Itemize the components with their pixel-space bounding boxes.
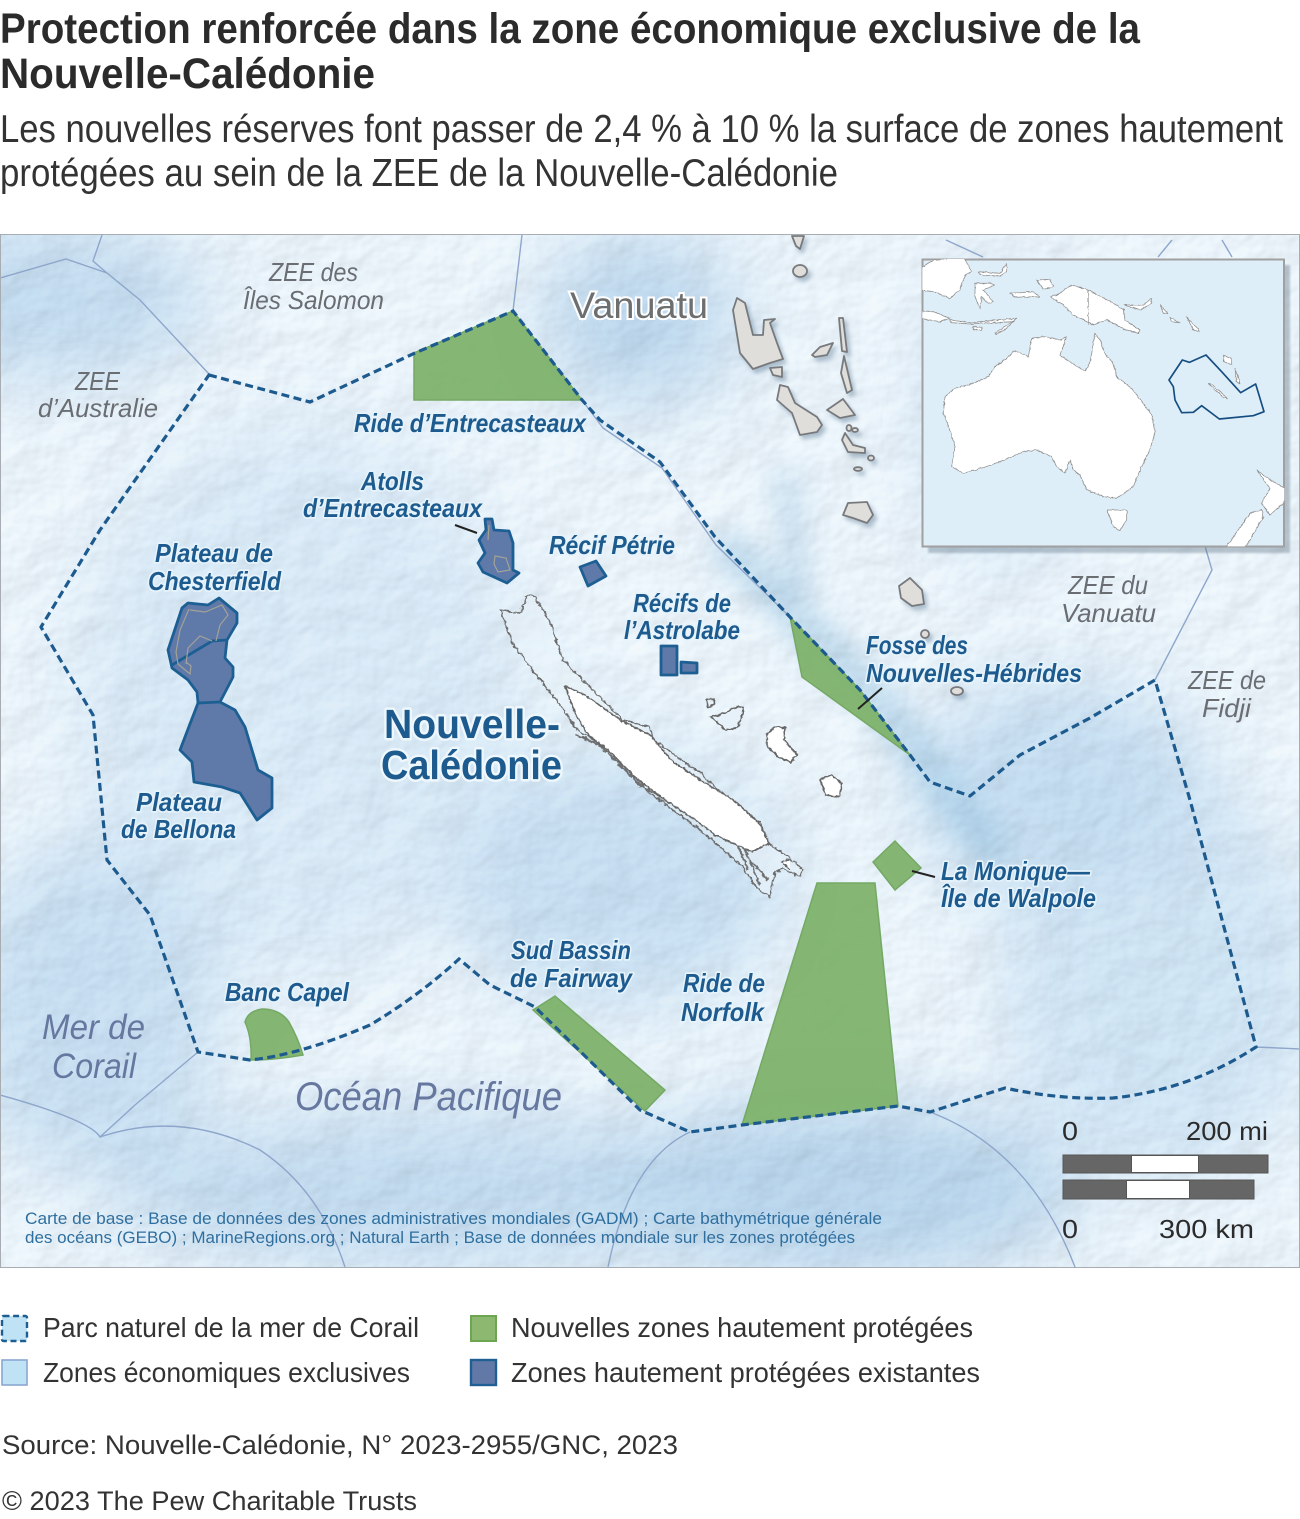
labels: neighbouring EEZ: ZEE de: [1187, 665, 1266, 695]
labels: protected zones: Atolls: [360, 466, 424, 496]
inset marine park outline: [1169, 355, 1264, 419]
title: [0, 5, 1141, 98]
labels: protected zones: Banc Capel: [225, 977, 350, 1007]
labels: protected zones: Chesterfield: [148, 566, 282, 596]
seabed relief texture: [0, 234, 1300, 1268]
scale bar: [1062, 1116, 1268, 1244]
leader lines: [455, 525, 935, 877]
subtitle: protégées au sein de la ZEE de la Nouvelle-Calédonie: [0, 152, 838, 195]
labels: neighbouring EEZ: ZEE: [74, 366, 121, 396]
zone: Récif Pétrie: [580, 561, 606, 586]
label: Mer de Corail: Mer de: [42, 1008, 145, 1047]
legend item: Nouvelles zones hautement protégées: Nouvelles zones hautement protégées: [511, 1312, 973, 1343]
labels: protected zones: de Bellona: [121, 814, 236, 844]
marine park boundary: [41, 311, 1256, 1132]
legend item: Zones hautement protégées existantes: Zones hautement protégées existantes: [511, 1357, 980, 1388]
label: Vanuatu: Vanuatu: [570, 285, 708, 326]
labels: protected zones: Sud Bassin: [511, 935, 631, 965]
scale bar: 0: [1062, 1214, 1078, 1244]
scale bar: 300 km: [1159, 1214, 1254, 1244]
zone: La Monique - Île de Walpole: [873, 841, 921, 890]
ocean depth shading: [0, 220, 1300, 1280]
labels: protected zones: Récifs de: [633, 588, 731, 618]
labels: neighbouring EEZ: Vanuatu: [1061, 598, 1156, 628]
Nouvelle-Calédonie lagoon and reefs: [500, 595, 803, 897]
labels: protected zones: Fosse des: [866, 630, 968, 660]
zone: Ride d'Entrecasteaux: [414, 311, 582, 400]
label: Nouvelle-Calédonie: Nouvelle-: [384, 701, 560, 747]
title: Nouvelle-Calédonie: [0, 50, 375, 98]
labels: protected zones: [121, 408, 1096, 1027]
map credits: Carte de base : Base de données des zones administratives mondiales (GADM) ; Carte bathymétrique générale: [25, 1210, 882, 1228]
legend: [2, 1312, 980, 1388]
legend item: Parc naturel de la mer de Corail: Parc naturel de la mer de Corail: [43, 1312, 419, 1343]
îles du Vanuatu: [733, 236, 963, 695]
labels: protected zones: l’Astrolabe: [624, 615, 740, 645]
scale bar: 0: [1062, 1116, 1078, 1146]
labels: protected zones: Récif Pétrie: [549, 530, 675, 560]
copyright: © 2023 The Pew Charitable Trusts: [2, 1486, 417, 1516]
Australia and neighbouring land: [920, 257, 1288, 548]
title: Protection renforcée dans la zone économique exclusive de la: [0, 5, 1141, 53]
zone: Récifs de l'Astrolabe: [661, 646, 697, 675]
zone: Fosse des Nouvelles-Hébrides: [790, 617, 910, 755]
labels: protected zones: Nouvelles-Hébrides: [866, 658, 1082, 688]
panel: map: [0, 220, 1300, 1280]
source: Source: Nouvelle-Calédonie, N° 2023-2955/GNC, 2023: [2, 1430, 678, 1460]
zone: Banc Capel: [245, 1009, 303, 1060]
label: Mer de Corail: Corail: [52, 1047, 137, 1086]
map credits: des océans (GEBO) ; MarineRegions.org ; Natural Earth ; Base de données mondiale sur les zones protégées: [25, 1229, 855, 1247]
labels: protected zones: Ride de: [683, 968, 765, 998]
labels: protected zones: Plateau de: [155, 538, 273, 568]
legend item: Zones économiques exclusives: Zones économiques exclusives: [43, 1357, 410, 1388]
map credits: [25, 1210, 882, 1247]
zone: Plateau de Chesterfield et Bellona: [168, 598, 272, 820]
labels: neighbouring EEZ: ZEE des: [268, 257, 358, 287]
labels: neighbouring EEZ: [38, 257, 1266, 723]
scale bar: 200 mi: [1186, 1116, 1268, 1146]
subtitle: [0, 108, 1283, 195]
existing protected zones: [168, 519, 697, 820]
labels: neighbouring EEZ: Îles Salomon: [243, 285, 384, 315]
inset locator map: [920, 257, 1290, 553]
labels: protected zones: de Fairway: [510, 963, 633, 993]
labels: protected zones: Île de Walpole: [941, 883, 1096, 913]
label: Mer de Corail: [42, 1008, 145, 1086]
labels: protected zones: Plateau: [136, 787, 222, 817]
Grande Terre: [565, 686, 802, 872]
labels: protected zones: d’Entrecasteaux: [303, 493, 483, 523]
new protected zones: [245, 311, 921, 1125]
zone: Ride de Norfolk: [742, 883, 898, 1125]
îles Loyauté: [707, 699, 842, 797]
exclusive economic zone boundaries: [0, 235, 1300, 1267]
labels: neighbouring EEZ: ZEE du: [1067, 570, 1148, 600]
labels: protected zones: Ride d’Entrecasteaux: [354, 408, 587, 438]
label: Océan Pacifique: Océan Pacifique: [295, 1075, 562, 1119]
labels: neighbouring EEZ: Fidji: [1202, 693, 1252, 723]
labels: neighbouring EEZ: d’Australie: [38, 393, 158, 423]
label: Nouvelle-Calédonie: [381, 701, 562, 788]
zone: Sud Bassin de Fairway: [533, 996, 665, 1111]
label: Nouvelle-Calédonie: Calédonie: [381, 742, 562, 788]
zone: Atolls d'Entrecasteaux: [478, 519, 519, 583]
labels: protected zones: La Monique—: [941, 856, 1091, 886]
labels: protected zones: Norfolk: [681, 997, 765, 1027]
